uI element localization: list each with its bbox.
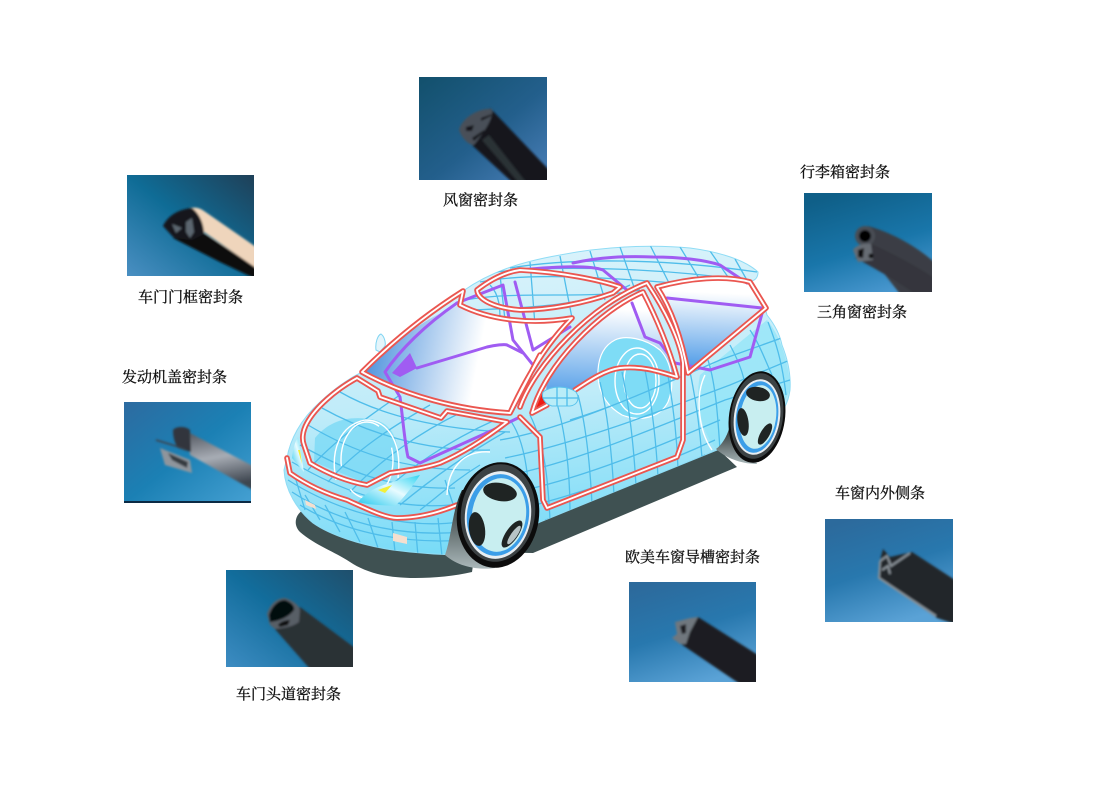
red triangular window seal bbox=[533, 380, 548, 410]
label: windshield seal: 风窗密封条 bbox=[443, 191, 518, 209]
car illustration bbox=[284, 245, 791, 578]
purple seal lines bbox=[385, 257, 763, 463]
car ground shadow bbox=[296, 448, 737, 578]
hood and panel tint bbox=[314, 418, 398, 484]
infographic canvas bbox=[122, 77, 953, 701]
label: channel seal: 欧美车窗导槽密封条 bbox=[625, 548, 760, 566]
photo: trunk seal bbox=[804, 193, 934, 294]
photo: door top seal bbox=[226, 570, 355, 669]
photo: hood seal bbox=[124, 402, 253, 503]
right side mirror bbox=[542, 387, 578, 406]
body grid lines bbox=[288, 245, 790, 556]
photo: inner and outer window strip bbox=[825, 519, 955, 624]
label: hood seal: 发动机盖密封条 bbox=[122, 369, 227, 386]
front wheel bbox=[445, 457, 546, 573]
rear wheel seen through door bbox=[598, 338, 672, 418]
left mirror outline bbox=[376, 334, 385, 352]
front headlight bbox=[358, 475, 420, 506]
label: door frame seal: 车门门框密封条 bbox=[138, 288, 243, 306]
rear quarter tint bbox=[698, 320, 790, 450]
door window bbox=[545, 292, 677, 405]
number plates and markers bbox=[305, 500, 407, 544]
label: quarter window seal: 三角窗密封条 bbox=[817, 303, 907, 321]
label: door top seal: 车门头道密封条 bbox=[236, 686, 341, 703]
red door and window seals bbox=[287, 270, 766, 518]
rear wheel bbox=[716, 368, 791, 466]
left headlight bbox=[292, 437, 304, 472]
windshield bbox=[362, 305, 572, 413]
label: inner and outer window strip: 车窗内外侧条 bbox=[835, 484, 925, 502]
photo: door frame seal bbox=[127, 175, 256, 279]
car body bbox=[284, 246, 790, 555]
rear window bbox=[660, 278, 766, 373]
front wheel ghost on hood bbox=[334, 375, 712, 498]
label: trunk seal: 行李箱密封条 bbox=[800, 163, 890, 181]
photo: channel seal bbox=[629, 582, 758, 684]
photo: windshield seal bbox=[419, 77, 549, 182]
